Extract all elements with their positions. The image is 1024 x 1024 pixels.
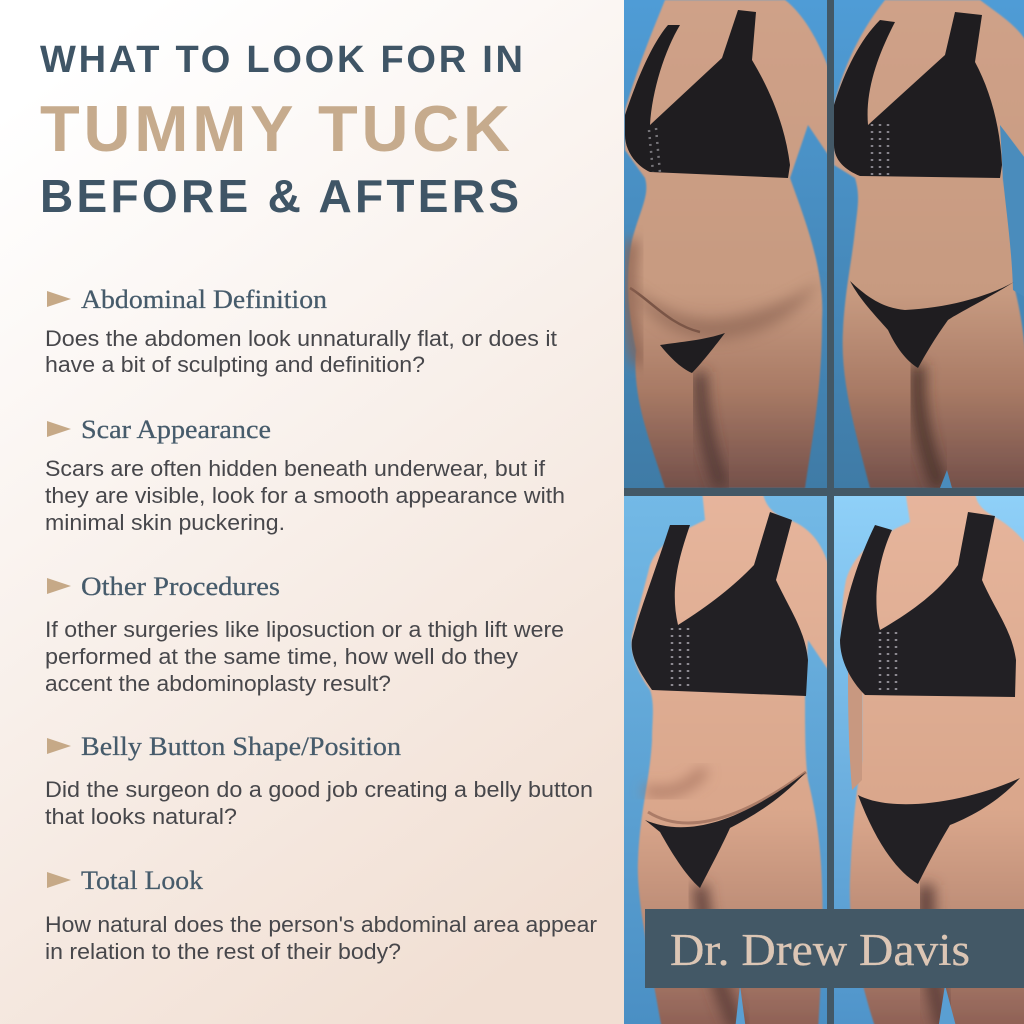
title line 1: WHAT TO LOOK FOR IN xyxy=(40,39,523,81)
bra hooks xyxy=(872,124,888,176)
icon: arrow xyxy=(47,738,71,754)
text block: Scars are often hidden beneath underwear, but if xyxy=(45,456,546,481)
item: abdominal definition xyxy=(45,284,557,377)
bra hooks xyxy=(649,128,660,173)
photo grid frame xyxy=(624,0,1024,1024)
photo: before, side view xyxy=(624,0,835,488)
item: other procedures xyxy=(45,571,564,696)
text block: in relation to the rest of their body? xyxy=(45,939,401,964)
icon: arrow xyxy=(47,578,71,594)
gap between legs xyxy=(940,470,952,488)
text block xyxy=(45,617,564,696)
text block: have a bit of sculpting and definition? xyxy=(45,352,425,377)
gap between legs xyxy=(939,988,956,1024)
text block: accent the abdominoplasty result? xyxy=(45,671,391,696)
text block xyxy=(45,777,593,829)
banner box xyxy=(645,909,1024,988)
text block: How natural does the person's abdominal area appear xyxy=(45,912,597,937)
text block: they are visible, look for a smooth appearance with xyxy=(45,483,565,508)
heading: Belly Button Shape/Position xyxy=(81,731,401,761)
bra hooks xyxy=(880,632,896,694)
title line 2: TUMMY TUCK xyxy=(40,92,510,165)
heading: Other Procedures xyxy=(81,571,280,601)
gap between legs xyxy=(736,988,746,1024)
photo: before, angled view xyxy=(624,490,835,1024)
heading: Scar Appearance xyxy=(81,414,271,444)
doctor name: Dr. Drew Davis xyxy=(670,925,970,975)
photo: after, angled view xyxy=(834,490,1024,1024)
background panel xyxy=(0,0,625,1024)
text block: Did the surgeon do a good job creating a belly button xyxy=(45,777,593,802)
item: total look xyxy=(45,865,597,964)
text block xyxy=(45,912,597,964)
title xyxy=(40,39,523,222)
text block: performed at the same time, how well do they xyxy=(45,644,518,669)
heading: Abdominal Definition xyxy=(81,284,327,314)
text block: that looks natural? xyxy=(45,804,237,829)
icon: arrow xyxy=(47,421,71,437)
text block: If other surgeries like liposuction or a thigh lift were xyxy=(45,617,564,642)
bra hooks xyxy=(672,628,688,690)
name banner xyxy=(645,909,1024,988)
heading: Total Look xyxy=(81,865,204,895)
text block xyxy=(45,326,557,377)
item: belly button shape/position xyxy=(45,731,593,829)
icon: arrow xyxy=(47,291,71,307)
text block: minimal skin puckering. xyxy=(45,510,285,535)
icon: arrow xyxy=(47,872,71,888)
text block: Does the abdomen look unnaturally flat, or does it xyxy=(45,326,557,351)
photo: after, side view xyxy=(834,0,1024,488)
title line 3: BEFORE & AFTERS xyxy=(40,170,519,222)
text block xyxy=(45,456,565,535)
item: scar appearance xyxy=(45,414,565,535)
